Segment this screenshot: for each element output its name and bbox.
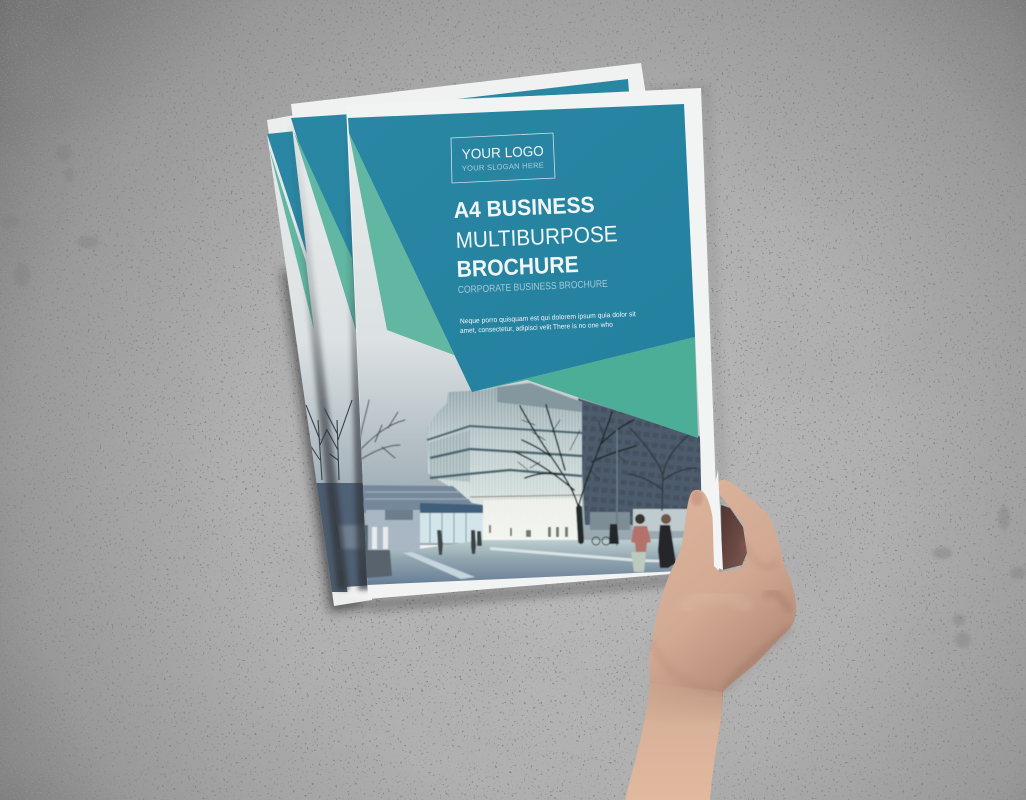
logo box: YOUR SLOGAN HERE — [462, 161, 544, 173]
forearm tone — [625, 683, 722, 800]
description text: amet, consectetur, adipisci velit There is no one who — [460, 322, 613, 335]
headline — [453, 192, 618, 282]
blue panel — [348, 104, 695, 392]
description text — [460, 311, 636, 335]
headline: A4 BUSINESS — [453, 192, 595, 223]
logo box — [451, 133, 555, 183]
green left shard — [349, 133, 472, 392]
subtitle: CORPORATE BUSINESS BROCHURE — [458, 279, 608, 296]
hand holding brochure — [625, 470, 796, 800]
green right shard — [480, 337, 698, 438]
brochure shadow — [282, 63, 727, 612]
description text: Neque porro quisquam est qui dolorem ipsum quia dolor sit — [460, 311, 636, 325]
front brochure — [340, 88, 719, 599]
glass tower — [427, 383, 582, 540]
dark office building — [578, 398, 705, 531]
trees — [352, 400, 696, 545]
back brochure — [267, 114, 372, 606]
spine shadows — [289, 115, 371, 590]
middle brochure — [291, 63, 646, 600]
hand shading — [652, 490, 790, 692]
plaza ground — [366, 538, 683, 585]
headline: MULTIBURPOSE — [455, 221, 618, 253]
inner hand shadow — [721, 505, 747, 570]
pedestrians — [437, 514, 676, 572]
canopy pavilion — [363, 484, 484, 569]
middle brochure blue cover peek — [457, 79, 629, 99]
logo box: YOUR LOGO — [461, 143, 544, 162]
page paper — [346, 88, 719, 599]
headline: BROCHURE — [456, 251, 579, 282]
paper edge behind thumb — [712, 470, 723, 570]
cover photo — [348, 132, 702, 585]
